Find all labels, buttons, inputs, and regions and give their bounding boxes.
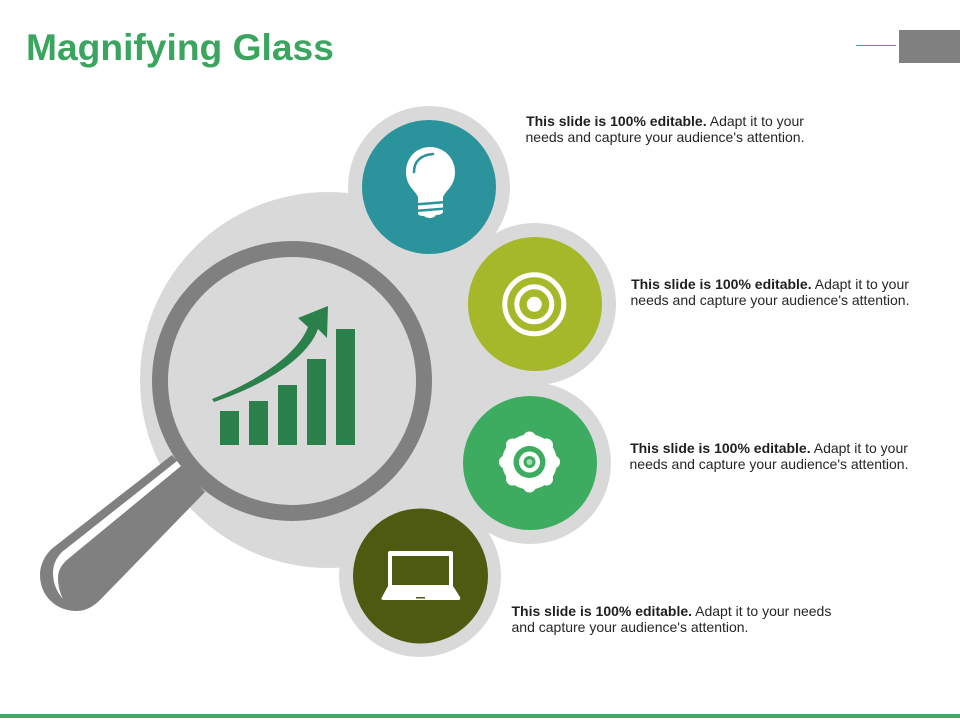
text block 4: This slide is 100% editable. Adapt it to your needs [512,603,831,619]
handle highlight [53,461,181,599]
title: Magnifying Glass [26,26,334,68]
magnifying glass [40,249,424,611]
text block 1 [526,113,804,145]
text block 3 [630,440,908,472]
teal disc [362,120,496,254]
background disc [140,192,516,568]
header accent line [856,45,896,46]
olive disc [353,508,488,644]
text block 3: This slide is 100% editable. Adapt it to your [630,440,908,456]
lens ring [160,249,424,513]
lime disc [468,237,602,371]
halo [449,382,611,544]
rising arrow [212,306,328,402]
halo [339,495,501,657]
text block 2 [630,276,909,308]
text block 4 [512,603,831,635]
bottom bar [0,714,960,718]
item 1: bulb [348,106,510,268]
icon: light bulb [406,147,455,218]
item 2: target [454,223,616,385]
green disc [463,396,597,530]
halo [348,106,510,268]
item 4: laptop [339,495,501,657]
handle [40,455,205,611]
text block 1: needs and capture your audience's attention. [526,129,804,145]
icon: laptop [381,551,460,600]
header grey tab [899,30,960,63]
halo [454,223,616,385]
text block 2: needs and capture your audience's attention. [630,292,909,308]
icon: gear [499,432,560,492]
halo join [508,376,544,388]
item 3: gear [449,376,611,544]
bars [220,329,355,445]
text block 2: This slide is 100% editable. Adapt it to your [631,276,909,292]
text block 3: needs and capture your audience's attention. [630,456,908,472]
growth chart icon [212,306,355,445]
icon: target [505,275,564,334]
text block 4: and capture your audience's attention. [512,619,748,635]
text block 1: This slide is 100% editable. Adapt it to your [526,113,804,129]
